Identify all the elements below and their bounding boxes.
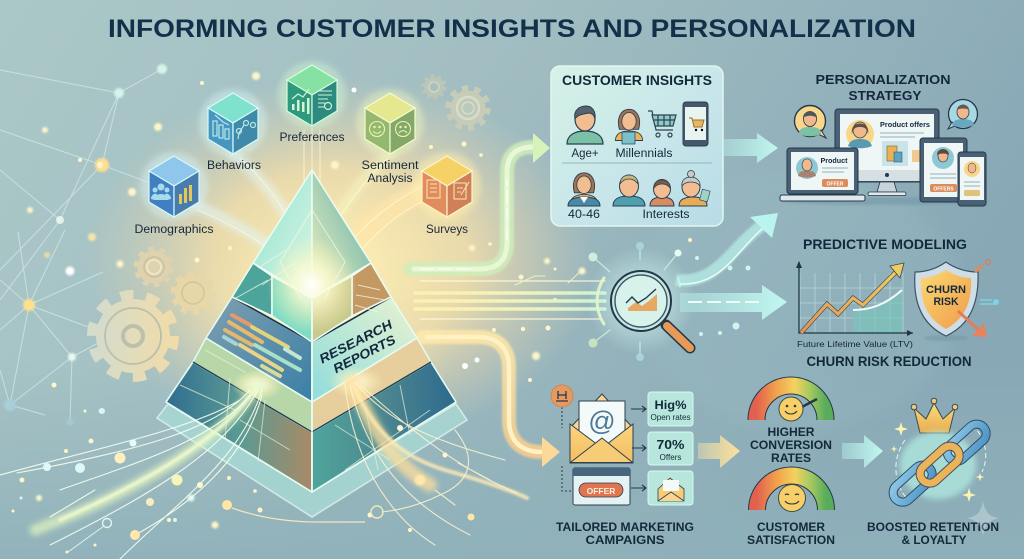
phone bbox=[958, 152, 986, 206]
avatar: older woman bbox=[679, 170, 710, 206]
avatar: man bbox=[567, 106, 603, 144]
icon: people bbox=[151, 184, 171, 200]
monitor bbox=[835, 109, 939, 196]
pyramid bottom tier bbox=[166, 338, 456, 492]
envelope with @: @ bbox=[588, 406, 616, 436]
stat box: open rates: Open rates bbox=[650, 413, 690, 422]
gauge: higher conversion rates: CONVERSION bbox=[750, 438, 832, 452]
panel: customer insights: Interests bbox=[642, 209, 690, 221]
watermark star bbox=[967, 501, 999, 536]
stream nodes: lower right bbox=[371, 425, 474, 520]
arrow: conversion to retention bbox=[842, 435, 883, 468]
tablet: OFFERS bbox=[933, 186, 954, 192]
cube labels: Surveys bbox=[426, 224, 468, 236]
arrow: curved to personalization bbox=[676, 213, 778, 284]
panel: customer insights: 40-46 bbox=[568, 209, 600, 221]
stat box: mail bbox=[648, 471, 693, 505]
flow: to marketing campaigns bbox=[423, 337, 560, 467]
panel: tailored marketing campaigns bbox=[551, 385, 694, 547]
gauge: customer satisfaction: SATISFACTION bbox=[747, 533, 835, 547]
pyramid label: RESEARCH bbox=[317, 316, 395, 366]
icon: churn risk shield: RISK bbox=[934, 296, 959, 308]
cube: behaviors bbox=[199, 89, 267, 157]
chart: future lifetime value bbox=[796, 261, 913, 349]
avatar: woman in blazer bbox=[568, 173, 600, 206]
title: INFORMING CUSTOMER INSIGHTS AND PERSONALIZATION bbox=[108, 15, 916, 43]
badge icon bbox=[551, 385, 573, 491]
gears: left bbox=[92, 249, 213, 377]
icon: magnifying glass bbox=[611, 271, 690, 348]
heading: personalization strategy bbox=[816, 72, 950, 103]
heading: predictive modeling: PREDICTIVE MODELING bbox=[803, 236, 967, 252]
avatar bubble left bbox=[794, 106, 826, 138]
arrow: magnifier to predictive modeling bbox=[680, 285, 787, 320]
browser offer bbox=[573, 468, 630, 505]
tablet bbox=[920, 138, 967, 202]
laptop: OFFER bbox=[827, 182, 844, 188]
pyramid: research reports bbox=[157, 170, 467, 517]
gauge: customer satisfaction: CUSTOMER bbox=[757, 520, 825, 534]
stat box: offers bbox=[648, 432, 693, 465]
light streams: lower right bbox=[328, 366, 527, 545]
network lines and nodes bbox=[0, 69, 162, 422]
heading: boosted retention and loyalty: BOOSTED RETENTION bbox=[867, 520, 999, 534]
arrow: insights to personalization bbox=[723, 133, 778, 163]
pyramid label: REPORTS bbox=[331, 332, 398, 376]
sparkle dots bbox=[4, 64, 750, 554]
flow: to magnifier bbox=[400, 246, 695, 357]
heading: churn risk reduction: CHURN RISK REDUCTION bbox=[806, 353, 972, 369]
monitor: Product offers bbox=[880, 120, 930, 129]
panel: customer insights bbox=[551, 66, 723, 226]
arrow: campaigns to conversion bbox=[698, 435, 740, 468]
flow nodes near magnifier bbox=[588, 242, 682, 361]
icon: phone with cart bbox=[683, 102, 708, 146]
light streams: lower left bbox=[0, 369, 283, 559]
laptop bbox=[780, 148, 865, 201]
cube labels: Preferences bbox=[280, 132, 345, 144]
campaign label bbox=[556, 520, 694, 547]
stat box: offers: 70% bbox=[656, 438, 684, 452]
devices: personalization bbox=[780, 100, 990, 206]
avatar: man 2 bbox=[613, 175, 645, 206]
cube labels: Sentiment bbox=[362, 160, 419, 172]
chart: future lifetime value: Future Lifetime Value (LTV) bbox=[797, 339, 913, 349]
gauge: higher conversion rates bbox=[750, 386, 832, 465]
gauge: higher conversion rates: HIGHER bbox=[768, 425, 815, 439]
cube labels: Analysis bbox=[368, 173, 413, 185]
cube labels bbox=[134, 132, 468, 236]
envelope with @ bbox=[570, 394, 633, 463]
pyramid upper tier bbox=[232, 170, 391, 342]
laptop: Product bbox=[820, 156, 848, 165]
heading: personalization strategy: PERSONALIZATION bbox=[816, 72, 950, 87]
gauge: higher conversion rates: RATES bbox=[771, 451, 811, 465]
browser offer: OFFER bbox=[587, 486, 615, 496]
cube: sentiment analysis bbox=[356, 89, 424, 157]
icon: churn risk shield: CHURN bbox=[926, 284, 966, 296]
flow: to customer insights bbox=[410, 133, 550, 269]
icon: churn risk shield bbox=[915, 260, 999, 341]
cube: demographics bbox=[140, 152, 208, 220]
heading: boosted retention and loyalty bbox=[867, 520, 999, 547]
icon: crown jewels bbox=[911, 398, 958, 410]
stat box: open rates bbox=[648, 392, 693, 426]
connector arrows bbox=[631, 406, 646, 491]
heading: personalization strategy: STRATEGY bbox=[848, 88, 922, 103]
stream nodes: lower left bbox=[43, 440, 365, 552]
panel: customer insights: Millennials bbox=[616, 148, 673, 160]
cube labels: Behaviors bbox=[207, 160, 261, 172]
cube labels: Demographics bbox=[134, 224, 214, 236]
avatar: boy bbox=[650, 180, 674, 206]
data beams from cubes to pyramid bbox=[195, 126, 425, 275]
pyramid label bbox=[317, 316, 402, 380]
campaign label: TAILORED MARKETING bbox=[556, 520, 694, 534]
icon: crown bbox=[914, 403, 955, 433]
icon: bars bbox=[179, 185, 192, 204]
gears: top right bbox=[423, 76, 488, 128]
cube: preferences bbox=[278, 61, 346, 129]
pyramid middle tier with report lines bbox=[206, 297, 417, 402]
cube: surveys bbox=[413, 152, 481, 220]
avatar bubble right bbox=[948, 100, 978, 129]
stat box: open rates: Hig% bbox=[654, 398, 687, 412]
icon: shopping cart bbox=[648, 111, 676, 137]
labels: Age+ bbox=[572, 148, 599, 160]
stat box: offers: Offers bbox=[660, 453, 682, 462]
heading: boosted retention and loyalty: & LOYALTY bbox=[902, 533, 966, 547]
pyramid base layer bbox=[157, 404, 467, 517]
campaign label: CAMPAIGNS bbox=[586, 533, 664, 547]
avatar: woman with tablet bbox=[615, 109, 643, 144]
panel heading: CUSTOMER INSIGHTS bbox=[562, 73, 712, 88]
gauge: customer satisfaction bbox=[747, 476, 835, 547]
icon: chain links bbox=[889, 420, 990, 506]
